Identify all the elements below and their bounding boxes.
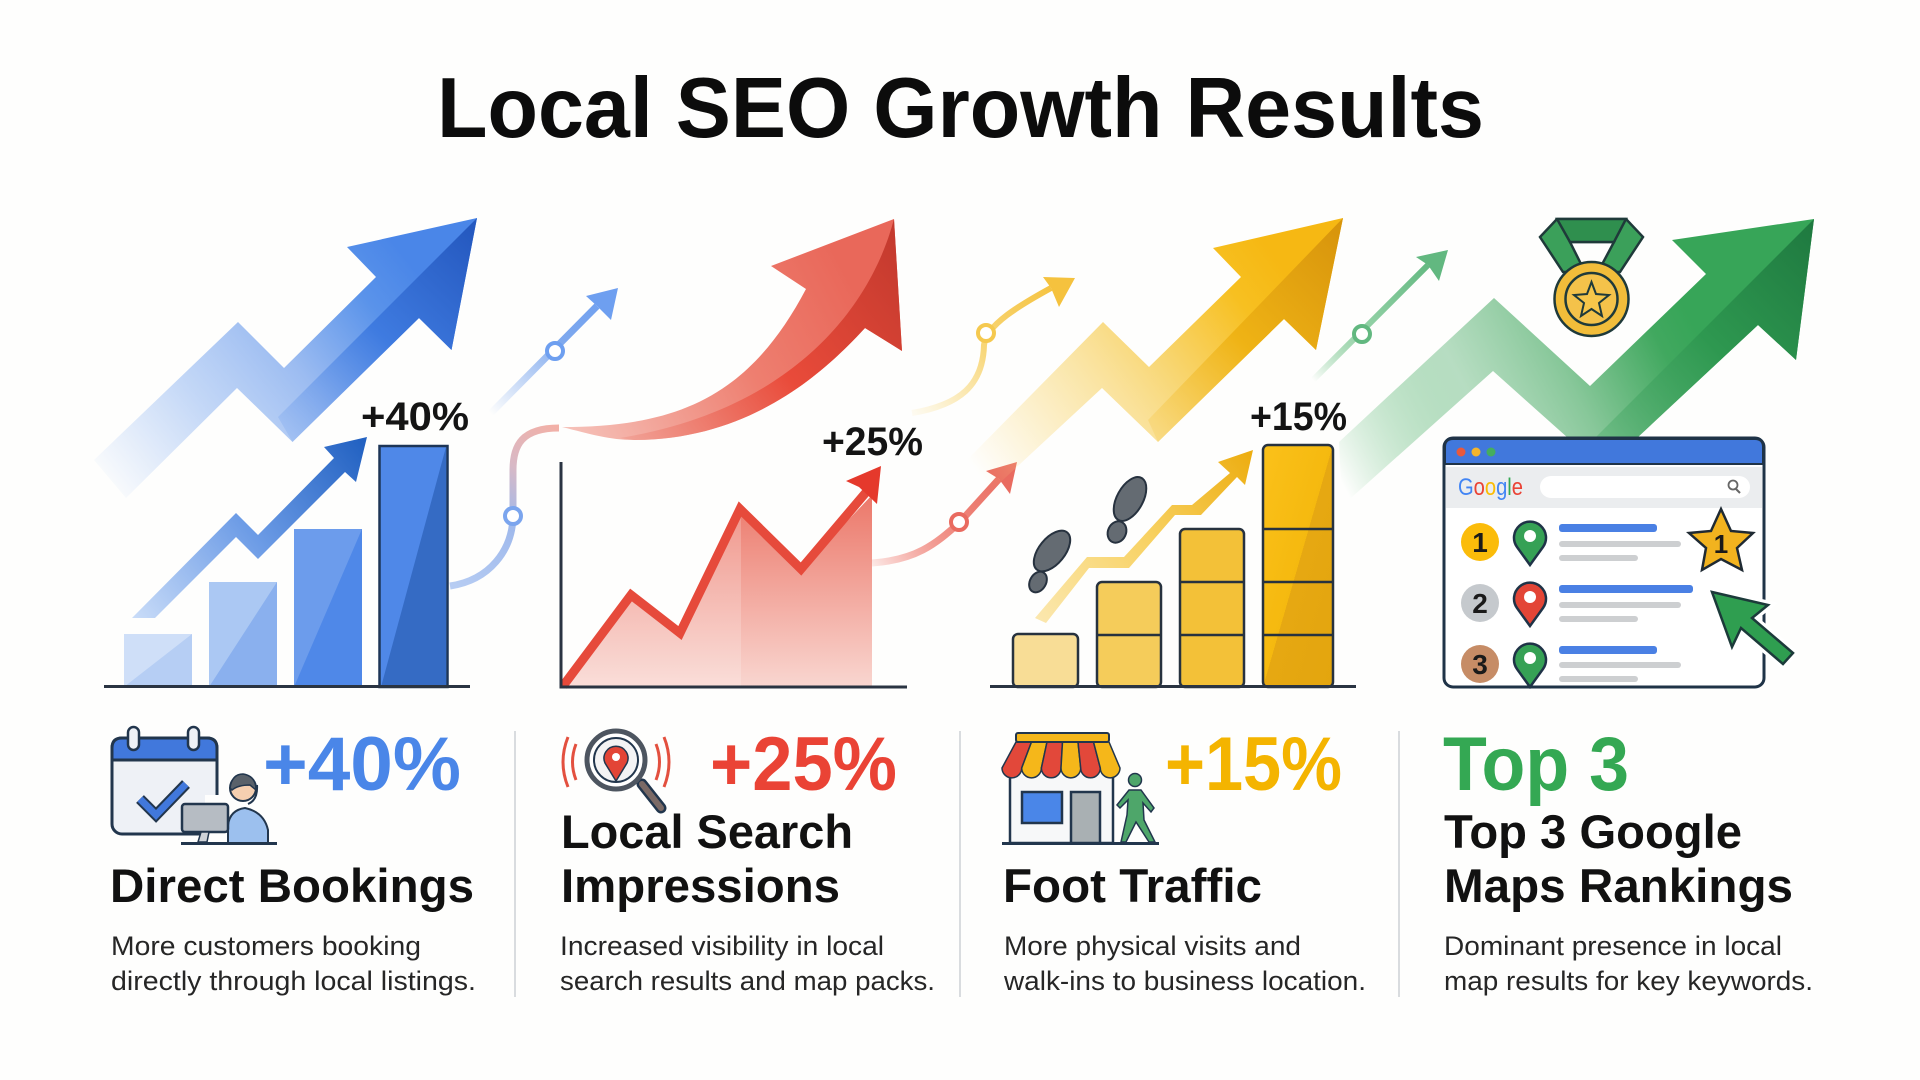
panel: top 3 rankings	[1443, 722, 1813, 996]
description: Increased visibility in local	[560, 931, 884, 961]
small arrow: green	[1313, 250, 1448, 380]
result row 2	[1461, 583, 1693, 626]
connector arrow: red	[872, 462, 1017, 563]
heading: Local Search	[561, 805, 853, 858]
axes	[561, 462, 907, 687]
result row 1: 1	[1472, 527, 1488, 558]
result row 2: 2	[1472, 588, 1488, 619]
description: walk-ins to business location.	[1003, 966, 1366, 996]
bar 2	[209, 582, 277, 687]
heading: Impressions	[561, 859, 840, 912]
divider	[959, 731, 961, 997]
icon: medal	[1540, 219, 1643, 336]
big arrow: yellow	[965, 218, 1343, 490]
arrow head	[846, 466, 881, 504]
baseline	[104, 685, 470, 688]
icon: star badge: 1	[1714, 529, 1728, 559]
title bar	[1445, 439, 1763, 464]
inner arrow	[1035, 450, 1253, 623]
stat: +40%	[263, 722, 461, 807]
bar 1	[124, 634, 192, 687]
divider	[1398, 731, 1400, 997]
baseline	[990, 685, 1356, 688]
description: More customers booking	[111, 931, 421, 961]
bar 1	[1013, 634, 1078, 687]
result row 3: 3	[1472, 649, 1488, 680]
icon: magnifier with pin	[563, 731, 669, 808]
result row 3	[1461, 644, 1681, 687]
bar 4	[1263, 445, 1333, 687]
area fill	[562, 495, 872, 687]
description: Dominant presence in local	[1444, 931, 1782, 961]
bar 4	[380, 446, 448, 687]
heading: Foot Traffic	[1003, 859, 1262, 912]
title: Local SEO Growth Results	[437, 61, 1484, 156]
small arrow: blue	[490, 288, 618, 414]
trend line	[563, 490, 868, 686]
chart: blue bars	[104, 395, 470, 688]
description: More physical visits and	[1004, 931, 1301, 961]
stat: +15%	[1165, 722, 1342, 807]
inner arrow	[132, 437, 367, 618]
icon: star badge	[1689, 509, 1753, 570]
connector: blue bar to red arrow	[450, 428, 559, 586]
result row 1	[1461, 522, 1681, 565]
chart: yellow stacked bars	[990, 395, 1356, 688]
icon: footprints	[1026, 472, 1153, 596]
panel: Google browser window	[1444, 438, 1793, 687]
heading: Maps Rankings	[1444, 859, 1793, 912]
bar 3	[294, 529, 362, 687]
chart: red area	[561, 420, 923, 687]
Google logo: Google	[1458, 474, 1523, 501]
heading: Top 3 Google	[1444, 805, 1742, 858]
heading: Direct Bookings	[110, 859, 474, 912]
divider	[514, 731, 516, 997]
bar 3	[1180, 529, 1244, 687]
panel: local search impressions	[560, 722, 935, 996]
description: map results for key keywords.	[1444, 966, 1813, 996]
big arrow: blue	[94, 218, 477, 498]
search band	[1446, 467, 1762, 508]
stat: Top 3	[1443, 722, 1629, 807]
big arrow: red	[562, 219, 902, 440]
icon: storefront with walker	[1002, 733, 1159, 845]
icon: cursor arrow	[1712, 592, 1793, 664]
stat label: +15%	[1250, 395, 1347, 439]
panel: foot traffic	[1002, 722, 1366, 996]
panel: direct bookings	[110, 722, 476, 996]
big arrow: green	[1339, 219, 1814, 506]
connector arrow: yellow	[912, 277, 1075, 413]
description: directly through local listings.	[111, 966, 476, 996]
stat label: +25%	[822, 420, 923, 464]
description: search results and map packs.	[560, 966, 935, 996]
icon: calendar with agent	[112, 727, 277, 845]
stat: +25%	[710, 722, 897, 807]
stat label: +40%	[361, 395, 469, 439]
bar 2	[1097, 582, 1161, 687]
